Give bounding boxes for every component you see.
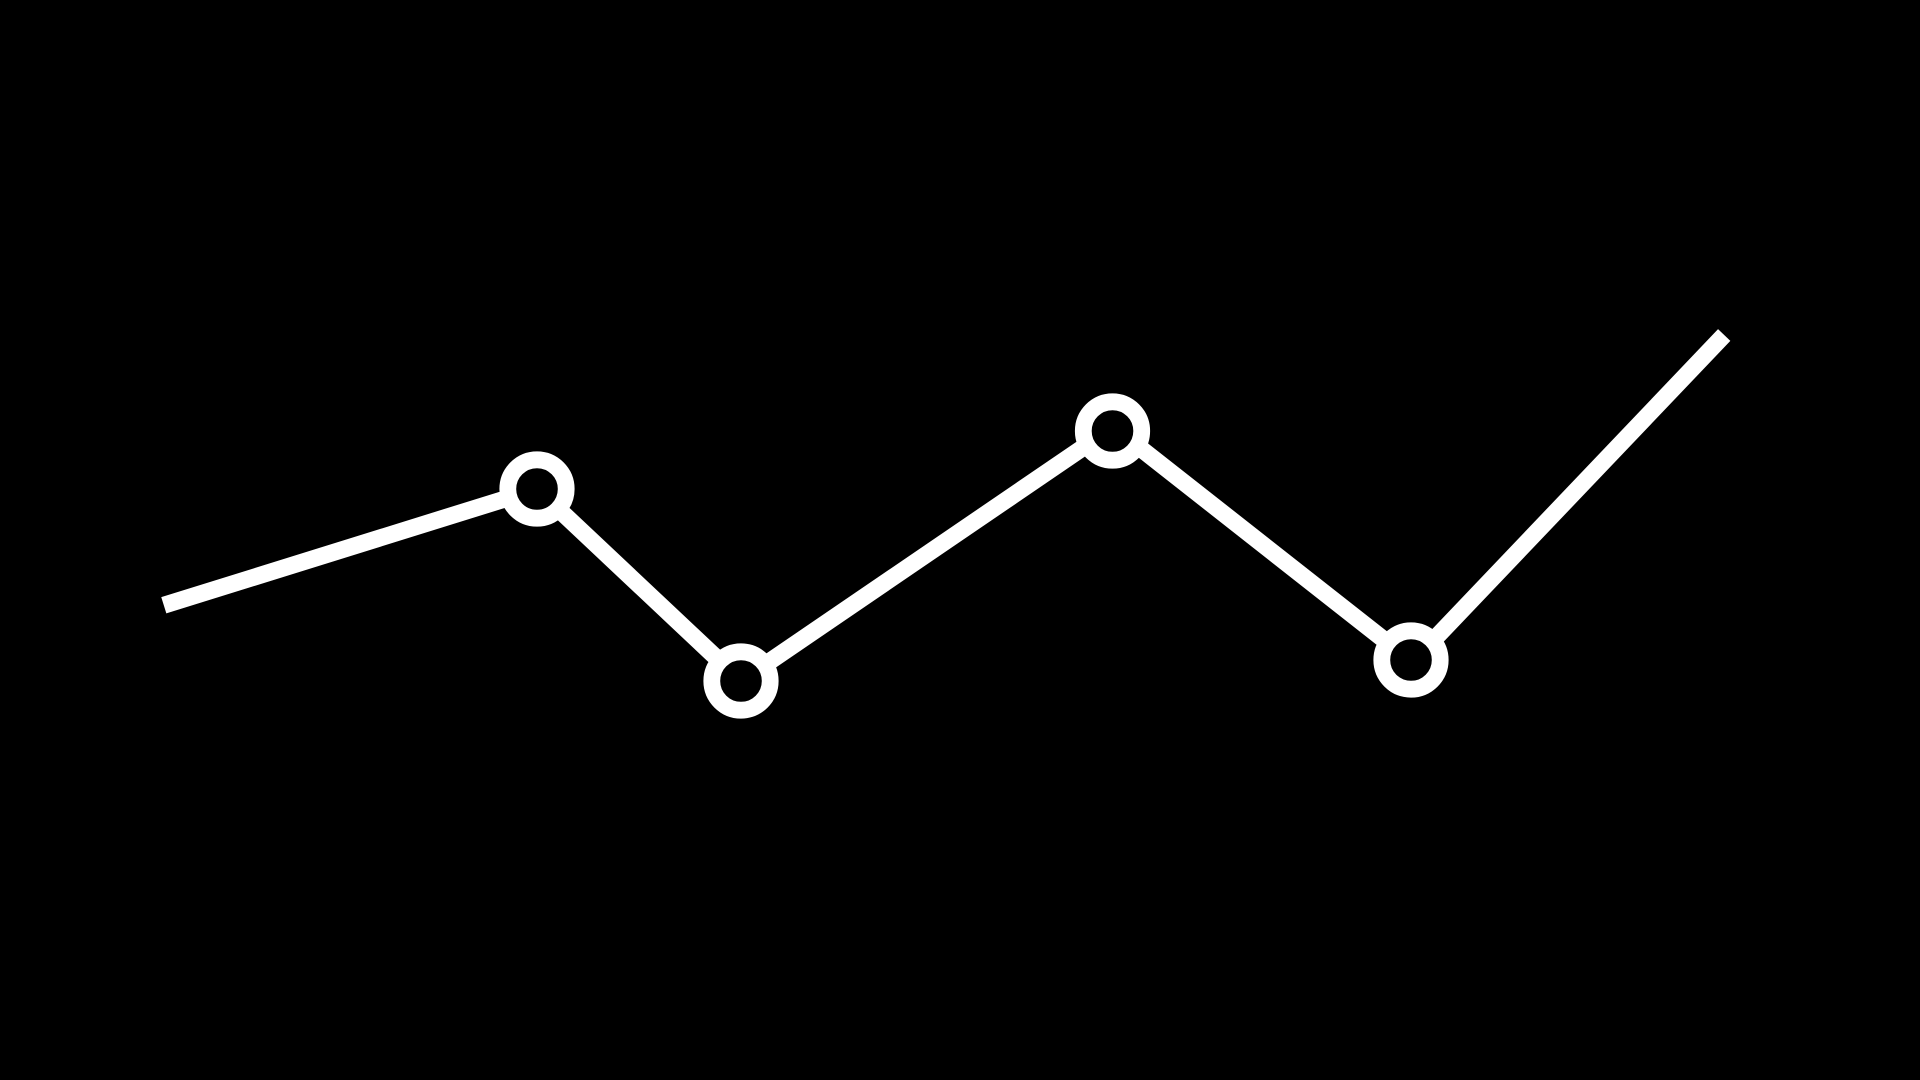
data point 1	[508, 460, 566, 518]
data point 2	[712, 652, 770, 710]
data point 4	[1382, 631, 1440, 689]
data line	[164, 335, 1724, 681]
data point 3	[1083, 402, 1142, 460]
